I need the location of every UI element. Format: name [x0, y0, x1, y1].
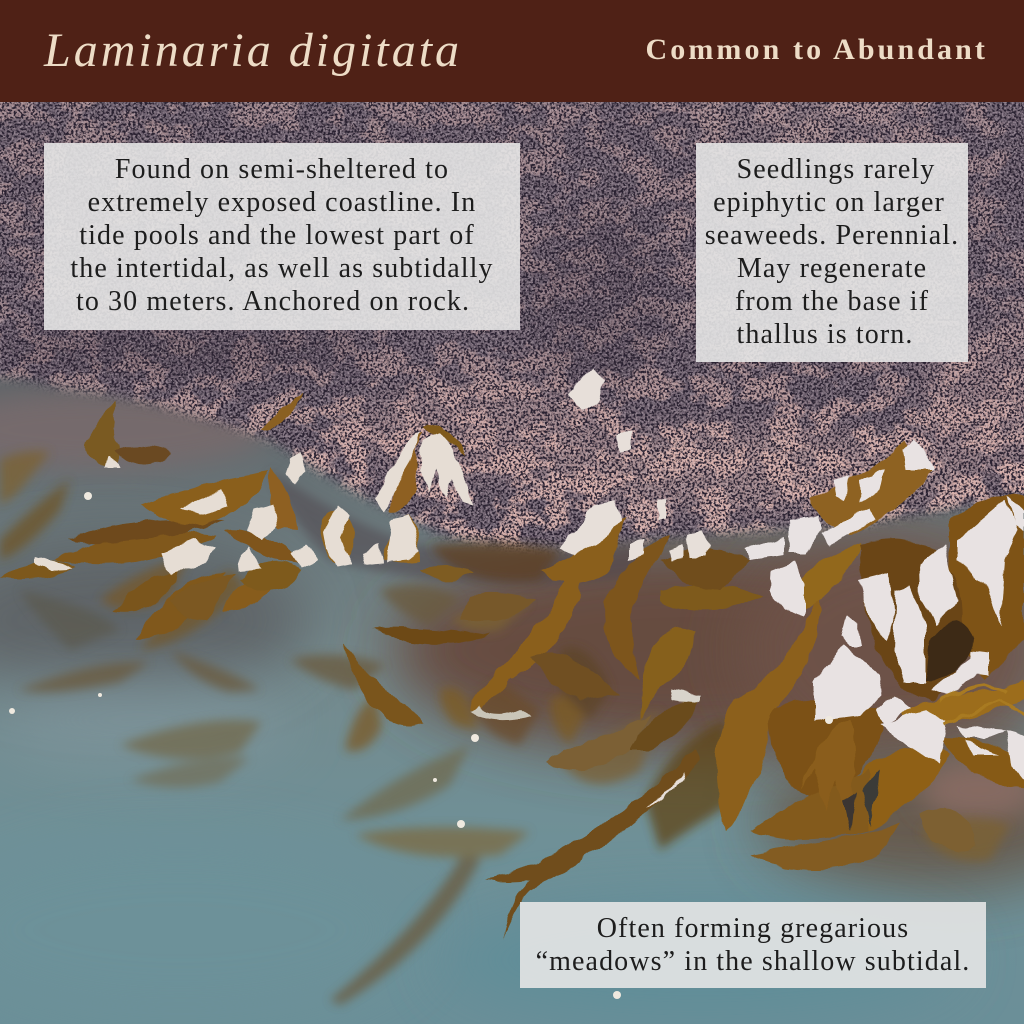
header bar [0, 0, 1024, 102]
text box: life history: thallus is torn. [736, 319, 914, 350]
text box: meadows: Often forming gregarious [597, 913, 909, 944]
text box: habitat: tide pools and the lowest part of [79, 220, 475, 251]
dark gaps and thin stipes [843, 621, 1024, 830]
kelp blades: right cluster [750, 440, 1024, 870]
abundance status: Common to Abundant [645, 33, 988, 66]
text box: life history: May regenerate [737, 253, 927, 284]
text box: habitat [44, 143, 520, 330]
middle kelp cluster [345, 368, 819, 940]
text box: life history: Seedlings rarely [737, 154, 935, 185]
specular water drops [9, 492, 833, 999]
text box: meadows: “meadows” in the shallow subtidal. [536, 946, 970, 977]
kelp blades: middle cluster [345, 515, 819, 940]
left kelp cluster [0, 392, 475, 640]
text box: habitat: extremely exposed coastline. In [88, 187, 476, 218]
text box: life history: epiphytic on larger [713, 187, 945, 218]
rock face texture [0, 94, 1024, 562]
rock edge shadow [270, 470, 640, 583]
text box: life history: seaweeds. Perennial. [705, 220, 959, 251]
white glare: middle cluster [470, 368, 711, 810]
text box: habitat: Found on semi-sheltered to [115, 154, 449, 185]
text box: life history: from the base if [735, 286, 929, 317]
text box: meadows [520, 902, 986, 988]
title: Laminaria digitata [44, 24, 462, 77]
white glare: right cluster [745, 438, 1024, 780]
text box: habitat: to 30 meters. Anchored on rock. [76, 286, 470, 317]
white glare: left cluster [34, 430, 474, 575]
right kelp cluster [745, 438, 1024, 870]
kelp blades: left cluster [0, 392, 475, 640]
text box: life history [696, 143, 968, 362]
text box: habitat: the intertidal, as well as subtidally [70, 253, 494, 284]
submerged blurred kelp [0, 451, 1010, 1005]
